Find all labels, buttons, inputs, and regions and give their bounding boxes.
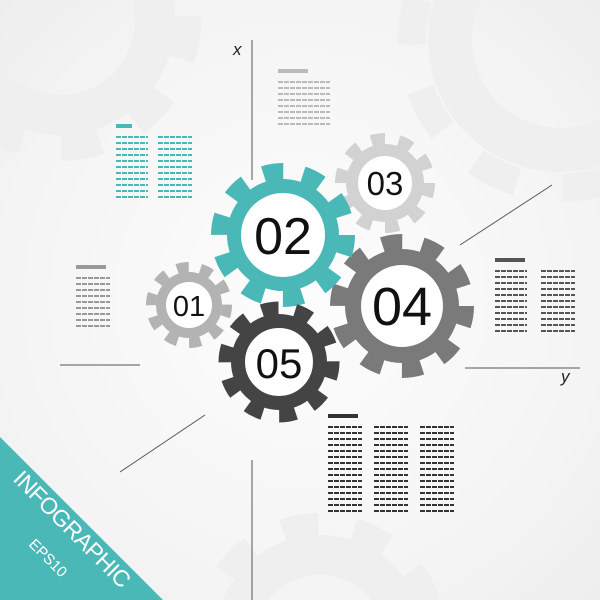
corner banner: INFOGRAPHIC — [8, 465, 136, 593]
axis label y: y — [561, 367, 570, 386]
gear 03: 03 — [367, 165, 403, 202]
gear 04: 04 — [372, 277, 432, 337]
gear 03 — [341, 139, 429, 227]
gear 02 — [220, 172, 346, 298]
gear 05 — [226, 309, 332, 415]
gear 05: 05 — [256, 340, 302, 387]
text block: teal — [116, 124, 192, 198]
text block: bottom — [328, 414, 454, 512]
text block: top — [278, 69, 330, 125]
gear 01 — [151, 267, 227, 343]
gear 01: 01 — [173, 291, 205, 323]
axis label x: x — [233, 40, 242, 59]
text block: left — [76, 265, 110, 327]
gear 02: 02 — [254, 208, 312, 266]
text block: right — [495, 258, 575, 332]
gear 04 — [339, 243, 465, 369]
corner banner: EPS10 — [25, 536, 70, 581]
